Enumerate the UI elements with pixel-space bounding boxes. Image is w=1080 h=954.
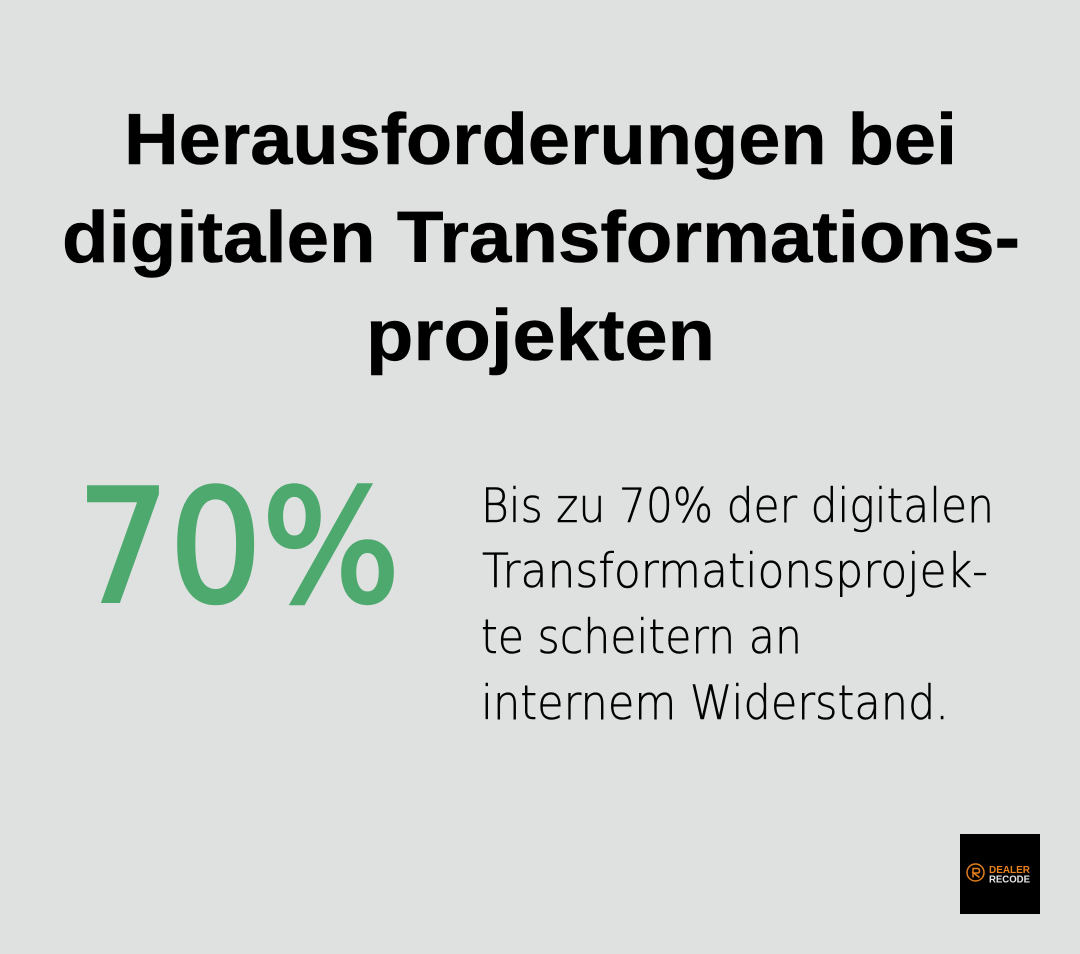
title: Herausforderungen bei [124,100,957,180]
logo wordmark: DEALER [989,864,1030,876]
icon: logo ring [967,864,984,881]
logo: Dealer Recode [960,834,1040,914]
title: projekten [366,296,715,376]
title: digitalen Transformations- [62,198,1020,278]
big statistic: 70%: 70% [77,456,400,638]
statistic description: Transformationsprojek- [482,544,988,599]
logo wordmark: RECODE [989,874,1030,886]
statistic description: te scheitern an [481,610,802,665]
statistic description: Bis zu 70% der digitalen [481,479,994,534]
statistic description [481,479,994,731]
statistic description: internem Widerstand. [481,676,949,731]
logo wordmark [989,864,1030,886]
title [62,100,1020,376]
